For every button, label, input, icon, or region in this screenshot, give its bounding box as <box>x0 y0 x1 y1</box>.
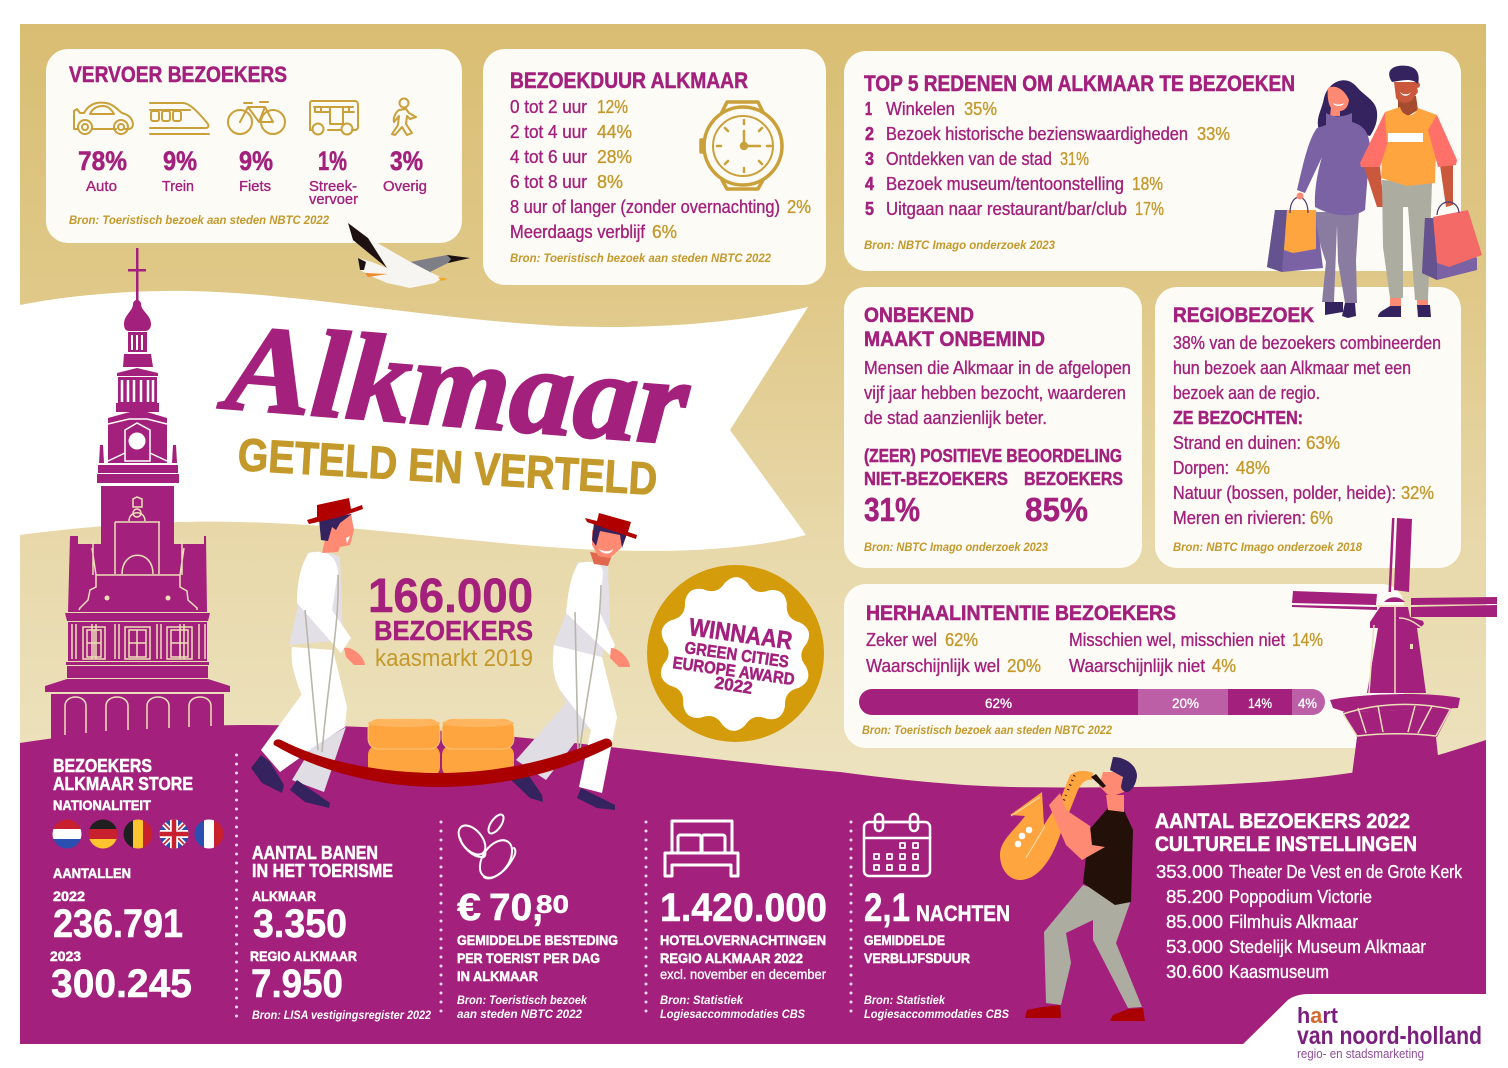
reasons list: 35% <box>964 99 997 119</box>
source: Bron: Toeristisch bezoek aan steden NBTC 2022 <box>862 723 1112 737</box>
stat: trein <box>162 146 197 195</box>
carrying pole <box>274 738 612 787</box>
stacked bar chart: 14% <box>1248 695 1272 711</box>
legend: 14% <box>1292 630 1323 650</box>
institution list: Poppodium Victorie <box>1229 887 1372 907</box>
source <box>457 993 588 1021</box>
column: hotelovernachtingen <box>660 821 827 1021</box>
duration list: 28% <box>597 147 632 167</box>
institution list: 353.000 <box>1156 862 1223 882</box>
heading: TOP 5 REDENEN OM ALKMAAR TE BEZOEKEN <box>864 71 1295 96</box>
source: Bron: NBTC Imago onderzoek 2023 <box>864 238 1055 252</box>
heading: MAAKT ONBEMIND <box>864 328 1045 351</box>
visited list: ZE BEZOCHTEN: <box>1173 408 1303 428</box>
logo <box>1297 1003 1482 1061</box>
institution list: Stedelijk Museum Alkmaar <box>1229 937 1426 957</box>
description <box>864 932 970 966</box>
duration list: 2% <box>787 197 811 217</box>
stat: streekvervoer: vervoer <box>309 191 358 208</box>
reasons list: 17% <box>1135 199 1164 219</box>
body text <box>864 358 1131 428</box>
figure: NACHTEN <box>916 901 1010 926</box>
man's bags <box>1422 202 1482 280</box>
visited list <box>1173 408 1434 528</box>
numbers: 300.245 <box>51 962 192 1006</box>
legend: 62% <box>945 630 978 650</box>
source: Bron: NBTC Imago onderzoek 2023 <box>864 540 1048 554</box>
figure: 70, <box>489 887 543 929</box>
body text <box>1173 333 1441 403</box>
body text: Mensen die Alkmaar in de afgelopen <box>864 358 1131 378</box>
stat: overig: Overig <box>383 178 427 195</box>
visited list: 63% <box>1306 433 1340 453</box>
column: culturele instellingen <box>1155 810 1463 982</box>
rating comparison: NIET-BEZOEKERS <box>864 469 1008 489</box>
body text: hun bezoek aan Alkmaar met een <box>1173 358 1411 378</box>
purple bottom area <box>20 725 1486 1044</box>
white logo corner <box>1243 994 1487 1045</box>
shirt <box>1083 808 1133 905</box>
panel: onbekend maakt onbemind <box>844 287 1142 568</box>
kaasmarkt visitors: BEZOEKERS <box>374 615 533 646</box>
trousers <box>1044 885 1142 1008</box>
icon: bicycle <box>228 102 285 134</box>
numbers <box>50 865 192 1006</box>
description: REGIO ALKMAAR 2022 <box>660 950 803 966</box>
icon: calendar <box>864 814 930 876</box>
source: Bron: Statistiek <box>660 993 744 1007</box>
reasons list: Bezoek museum/tentoonstelling <box>886 174 1124 194</box>
figure <box>457 887 569 929</box>
stat: fiets: 9% <box>239 146 273 176</box>
heading: ONBEKEND <box>864 304 974 327</box>
numbers: 3.350 <box>253 902 347 946</box>
duration list: 6% <box>652 222 677 242</box>
heading: AANTAL BEZOEKERS 2022 <box>1155 810 1410 833</box>
rating comparison: 31% <box>864 491 920 528</box>
body text: 38% van de bezoekers combineerden <box>1173 333 1441 353</box>
duration list: Meerdaags verblijf <box>510 222 646 242</box>
duration list <box>510 97 811 242</box>
heading: IN HET TOERISME <box>252 861 393 881</box>
figure: 80 <box>536 891 569 919</box>
heading: BEZOEKERS <box>53 756 152 776</box>
reasons list: Ontdekken van de stad <box>886 149 1052 169</box>
legend: Waarschijnlijk wel <box>866 656 1000 676</box>
stacked bar chart <box>859 689 1325 715</box>
duration list: 12% <box>597 97 628 117</box>
icon: train <box>150 103 209 134</box>
legend: 4% <box>1212 656 1236 676</box>
stat: trein: Trein <box>162 178 194 195</box>
institution list: Theater De Vest en de Grote Kerk <box>1229 862 1463 882</box>
column: verblijfsduur <box>864 814 1010 1021</box>
duration list: 8 uur of langer (zonder overnachting) <box>510 197 780 217</box>
panel: herhaalintentie <box>844 584 1404 748</box>
stat: overig <box>383 146 427 195</box>
numbers: ALKMAAR <box>252 888 316 904</box>
stat: auto: Auto <box>86 178 117 195</box>
heading: ALKMAAR STORE <box>53 774 193 794</box>
stat: trein: 9% <box>163 146 197 176</box>
heading: AANTAL BANEN <box>252 843 378 863</box>
institution list: 85.200 <box>1166 887 1223 907</box>
institution list: Kaasmuseum <box>1229 962 1329 982</box>
woman's bags <box>1267 197 1323 272</box>
woman <box>1296 80 1377 318</box>
numbers: 2022 <box>53 888 85 904</box>
legend: Waarschijnlijk niet <box>1069 656 1205 676</box>
award badge <box>647 565 824 742</box>
icon: watch <box>701 102 782 189</box>
reasons list: 33% <box>1197 124 1230 144</box>
visited list: Meren en rivieren: <box>1173 508 1306 528</box>
visited list: Dorpen: <box>1173 458 1229 478</box>
stat: overig: 3% <box>390 146 423 176</box>
visited list: Natuur (bossen, polder, heide): <box>1173 483 1396 503</box>
rating comparison: (ZEER) POSITIEVE BEOORDELING <box>864 446 1122 466</box>
icon: walker <box>392 98 416 135</box>
body text: vijf jaar hebben bezocht, waarderen <box>864 383 1126 403</box>
illustration: saxophonist <box>1000 757 1145 1021</box>
description: IN ALKMAAR <box>457 968 538 984</box>
panel: bezoekduur alkmaar <box>483 49 826 285</box>
logo: hart <box>1297 1003 1339 1028</box>
stat: auto: 78% <box>78 146 127 176</box>
white banner <box>20 291 808 551</box>
description: PER TOERIST PER DAG <box>457 950 600 966</box>
duration list: 8% <box>597 172 623 192</box>
column: besteding <box>453 812 618 1021</box>
visited list: 6% <box>1310 508 1333 528</box>
figure <box>864 886 1010 930</box>
stat: fiets: Fiets <box>239 178 271 195</box>
legend: 20% <box>1007 656 1041 676</box>
stacked bar chart: 62% <box>985 695 1012 711</box>
institution list: 53.000 <box>1166 937 1223 957</box>
duration list: 6 tot 8 uur <box>510 172 587 192</box>
heading: REGIOBEZOEK <box>1173 304 1314 327</box>
carrier right <box>508 513 637 810</box>
source: Logiesaccommodaties CBS <box>864 1007 1009 1021</box>
logo: regio- en stadsmarketing <box>1297 1046 1424 1061</box>
award badge: 2022 <box>713 673 754 698</box>
subtitle: GETELD EN VERTELD <box>236 428 659 505</box>
institution list: 30.600 <box>1166 962 1223 982</box>
icon: car <box>74 103 133 134</box>
heading: BEZOEKDUUR ALKMAAR <box>510 68 748 93</box>
body text: de stad aanzienlijk beter. <box>864 408 1047 428</box>
heading: CULTURELE INSTELLINGEN <box>1155 833 1417 856</box>
description: VERBLIJFSDUUR <box>864 950 970 966</box>
duration list: 0 tot 2 uur <box>510 97 587 117</box>
numbers: REGIO ALKMAAR <box>250 948 357 964</box>
icon: bed <box>665 821 738 876</box>
stat: streekvervoer: 1% <box>318 146 347 176</box>
illustration: seagull <box>348 223 470 288</box>
heading <box>53 756 193 794</box>
reasons list: Uitgaan naar restaurant/bar/club <box>886 199 1127 219</box>
source <box>864 993 1009 1021</box>
numbers: 2023 <box>50 948 81 964</box>
source: Bron: Toeristisch bezoek <box>457 993 588 1007</box>
reasons list: 18% <box>1132 174 1163 194</box>
reasons list: 2 <box>865 124 874 144</box>
description: excl. november en december <box>660 966 826 982</box>
heading <box>864 304 1045 351</box>
legend: Misschien wel, misschien niet <box>1069 630 1285 650</box>
illustration: shoppers <box>1267 66 1482 318</box>
carrier left <box>251 498 365 808</box>
reasons list: 4 <box>865 174 874 194</box>
heading <box>1155 810 1417 856</box>
kaasmarkt visitors <box>368 570 533 672</box>
source: Bron: Toeristisch bezoek aan steden NBTC 2022 <box>69 213 329 227</box>
institution list <box>1156 862 1463 982</box>
icon: coins <box>453 812 519 884</box>
panel: vervoer bezoekers <box>46 49 462 243</box>
award badge: WINNAAR <box>687 613 794 655</box>
source <box>660 993 805 1021</box>
description <box>457 932 618 984</box>
reasons list: Bezoek historische bezienswaardigheden <box>886 124 1188 144</box>
head <box>1099 772 1124 812</box>
source: Bron: NBTC Imago onderzoek 2018 <box>1173 540 1362 554</box>
illustration: cheese carriers <box>251 498 637 810</box>
institution list: Filmhuis Alkmaar <box>1229 912 1358 932</box>
numbers: 236.791 <box>53 902 183 946</box>
reasons list: 5 <box>865 199 874 219</box>
description: GEMIDDELDE BESTEDING <box>457 932 618 948</box>
icon: bus <box>310 101 358 134</box>
figure: € <box>457 887 481 929</box>
stat: streekvervoer: Streek- <box>309 178 357 195</box>
rating comparison: 85% <box>1025 491 1088 528</box>
description: GEMIDDELDE <box>864 932 945 948</box>
description: HOTELOVERNACHTINGEN <box>660 932 826 948</box>
legend: Zeker wel <box>866 630 937 650</box>
heading <box>252 843 393 881</box>
source: Bron: Toeristisch bezoek aan steden NBTC 2022 <box>510 251 771 265</box>
column: alkmaar store <box>50 756 224 1006</box>
stat: fiets <box>239 146 273 195</box>
figure: 2,1 <box>864 886 910 930</box>
kaasmarkt visitors: 166.000 <box>368 570 533 623</box>
panel: regiobezoek <box>1155 287 1461 568</box>
rating comparison: BEZOEKERS <box>1024 469 1123 489</box>
stat: auto <box>78 146 127 195</box>
flags <box>52 819 224 849</box>
institution list: 85.000 <box>1166 912 1223 932</box>
man <box>1360 66 1457 317</box>
source: Bron: LISA vestigingsregister 2022 <box>252 1008 431 1022</box>
rating comparison <box>864 446 1123 528</box>
duration list: 44% <box>597 122 632 142</box>
stacked bar chart: 4% <box>1298 695 1317 711</box>
figure: 1.420.000 <box>660 886 827 930</box>
duration list: 2 tot 4 uur <box>510 122 587 142</box>
award badge: EUROPE AWARD <box>671 653 796 689</box>
illustration: tower <box>45 248 230 760</box>
reasons list: Winkelen <box>886 99 955 119</box>
heading: HERHAALINTENTIE BEZOEKERS <box>866 602 1176 625</box>
duration list: 4 tot 6 uur <box>510 147 587 167</box>
legend <box>866 630 1323 676</box>
column: banen in het toerisme <box>250 843 431 1022</box>
heading: VERVOER BEZOEKERS <box>69 62 287 87</box>
title: Alkmaar: Alkmaar <box>215 298 695 471</box>
panel: top 5 redenen <box>844 51 1461 271</box>
arm <box>1049 793 1105 860</box>
body text: bezoek aan de regio. <box>1173 383 1320 403</box>
stat: streekvervoer <box>309 146 358 208</box>
reasons list: 3 <box>865 149 874 169</box>
hair <box>1110 757 1137 792</box>
numbers <box>250 888 357 1006</box>
numbers: 7.950 <box>251 962 343 1006</box>
source: Logiesaccommodaties CBS <box>660 1007 805 1021</box>
cheese stack <box>368 719 514 777</box>
illustration: windmill <box>1292 518 1497 775</box>
reasons list <box>865 99 1230 219</box>
visited list: 48% <box>1236 458 1270 478</box>
award badge: GREEN CITIES <box>683 638 790 672</box>
reasons list: 1 <box>865 99 872 119</box>
stacked bar chart: 20% <box>1172 695 1199 711</box>
visited list: 32% <box>1401 483 1434 503</box>
source: Bron: Statistiek <box>864 993 946 1007</box>
subheading: NATIONALITEIT <box>53 797 151 813</box>
saxophone <box>1000 771 1093 880</box>
source: aan steden NBTC 2022 <box>457 1007 582 1021</box>
numbers: AANTALLEN <box>53 865 131 881</box>
visited list: Strand en duinen: <box>1173 433 1301 453</box>
kaasmarkt visitors: kaasmarkt 2019 <box>375 645 533 672</box>
description <box>660 932 826 982</box>
shoes <box>1025 1005 1145 1021</box>
reasons list: 31% <box>1060 149 1089 169</box>
